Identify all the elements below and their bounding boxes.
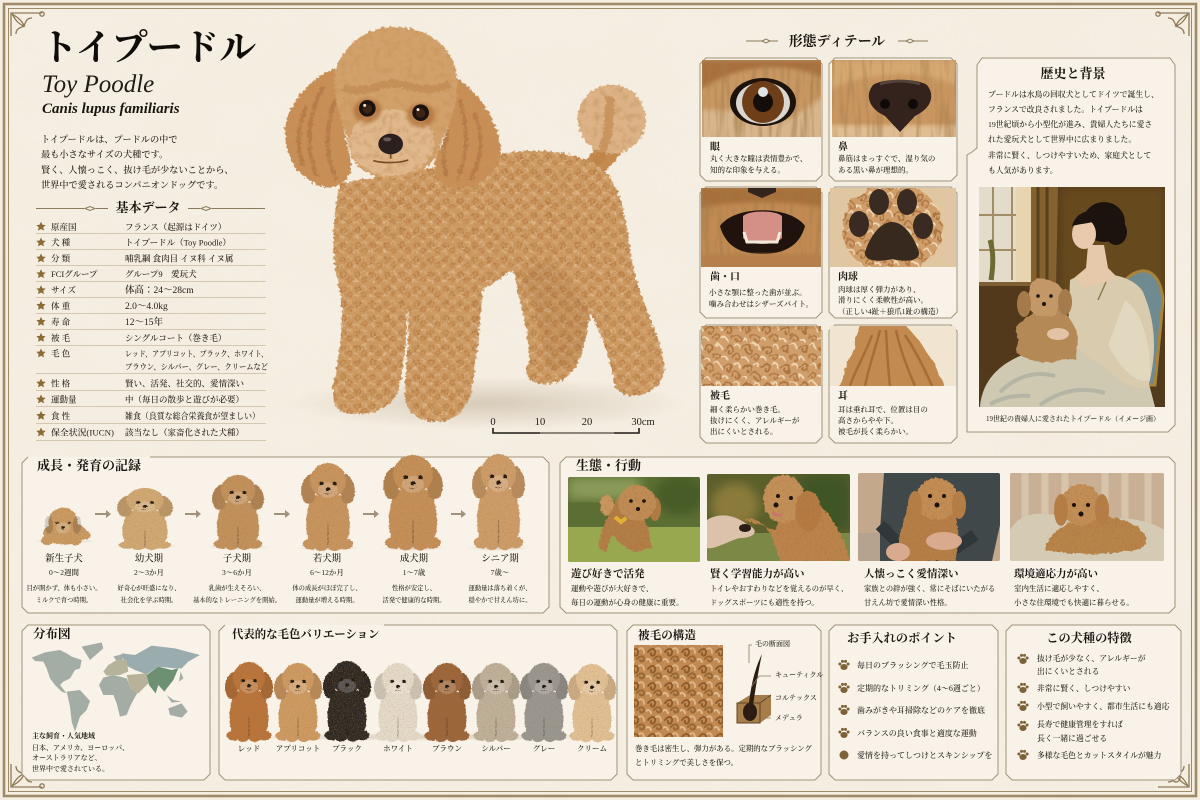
- row: temperament: 性 格: [51, 378, 71, 388]
- row: lifespan: 12〜15年: [125, 316, 164, 328]
- stage: puppy: 乳歯が生えそろい、: [209, 583, 265, 592]
- scale bar: 30cm: [631, 417, 655, 428]
- title block: [41, 27, 256, 117]
- intro text: トイプードルは、プードルの中で: [41, 134, 178, 144]
- stage: newborn: 0〜2週間: [49, 568, 79, 577]
- coat caption: [710, 389, 800, 436]
- mouth caption: 歯・口: [710, 270, 740, 283]
- heading: basic data: 基本データ: [115, 200, 181, 215]
- row: temperament: [51, 378, 244, 388]
- dress torso and sleeve: [1068, 274, 1154, 389]
- arrow: [274, 510, 290, 518]
- stage: senior: 運動量は落ち着くが、: [469, 583, 531, 592]
- dog: brown: ブラウン: [432, 744, 462, 753]
- feature 4: 長く一緒に過ごせる: [1037, 733, 1107, 743]
- scale bar: [490, 417, 655, 433]
- dog: apricot: アプリコット: [276, 744, 320, 753]
- row: exercise: 中（毎日の散歩と遊びが必要）: [125, 394, 244, 404]
- row: exercise: 運動量: [51, 394, 77, 404]
- title: トイプードル: [41, 27, 256, 68]
- row: size: サイズ: [51, 285, 76, 295]
- dog: silver: シルバー: [481, 744, 511, 753]
- row: weight: 2.0〜4.0kg: [125, 302, 168, 312]
- row: coat: [51, 333, 226, 343]
- intro text: 最も小さなサイズの犬種です。: [41, 148, 168, 160]
- paw caption: （正しい4趾＋狼爪1趾の構造）: [838, 306, 943, 316]
- curtain: [1031, 187, 1058, 290]
- history text: 非常に賢く、しつけやすいため、家庭犬として: [988, 150, 1151, 160]
- map text: オーストラリアなど、: [32, 754, 102, 762]
- left eye: [353, 99, 381, 123]
- panel: coat: [700, 324, 822, 444]
- stage: puppy: 子犬期: [223, 552, 252, 564]
- panel: coat structure: [627, 625, 823, 780]
- colours heading: 代表的な毛色バリエーション: [232, 627, 379, 641]
- features heading: この犬種の特徴: [1046, 630, 1132, 645]
- photo: affectionate: [858, 473, 1000, 561]
- stage: newborn: ミルクで育つ時期。: [36, 595, 92, 604]
- paw caption: 肉球は厚く弾力があり、: [838, 284, 920, 294]
- row: diet: [51, 411, 260, 421]
- row: coat: シングルコート（巻き毛）: [125, 333, 226, 343]
- stage: young: 6〜12か月: [310, 568, 344, 577]
- photo: adaptable: [1010, 473, 1164, 561]
- feature 4: [1017, 719, 1123, 743]
- photo: playful: [568, 475, 705, 562]
- stage: adult: 活発で健康的な時期。: [383, 595, 445, 604]
- hair cross section diagram: [737, 639, 823, 723]
- head: [334, 27, 457, 178]
- stage: newborn: 新生子犬: [45, 552, 83, 564]
- panel: basic data table: [36, 200, 268, 440]
- nose caption: 鼻筋はまっすぐで、湿り気の: [838, 153, 935, 163]
- photo: intelligent: [707, 474, 850, 561]
- dog: cream: クリーム: [577, 744, 607, 753]
- row: lifespan: [51, 316, 164, 328]
- right ear: [435, 75, 501, 188]
- caption: playful: 遊び好きで活発: [571, 567, 645, 580]
- arrow: [185, 510, 201, 518]
- history text: も人気があります。: [988, 165, 1058, 175]
- row: taxonomy: 哺乳綱 食肉目 イヌ科 イヌ属: [125, 254, 233, 264]
- coat texture swatch: [634, 645, 723, 737]
- dog: silver: [472, 663, 520, 753]
- row: origin: フランス（起源はドイツ）: [125, 222, 226, 232]
- dog: red: [225, 662, 273, 753]
- caption: playful: 毎日の運動が心身の健康に重要。: [571, 597, 684, 607]
- intro text: [41, 134, 234, 190]
- map text: 世界中で愛されている。: [32, 764, 109, 773]
- ear image: [829, 325, 957, 390]
- ear caption: [838, 389, 928, 436]
- main illustration: standing toy poodle: [285, 27, 687, 430]
- mouth caption: 噛み合わせはシザーズバイト。: [709, 298, 813, 308]
- tail: [578, 85, 646, 173]
- caption: adaptable: [1014, 567, 1134, 607]
- scale bar: 0: [490, 417, 496, 428]
- right eye: [407, 103, 435, 127]
- window: [979, 187, 1031, 282]
- feature 1: 出にくいとされる: [1037, 666, 1099, 676]
- feature 2: 非常に賢く、しつけやすい: [1037, 683, 1131, 693]
- history text: プードルは水鳥の回収犬としてドイツで誕生し、: [988, 89, 1159, 99]
- stage: infant: 幼犬期: [135, 552, 164, 564]
- intro text: 世界中で愛されるコンパニオンドッグです。: [41, 179, 223, 190]
- stage: senior: 穏やかで甘えん坊に。: [469, 595, 531, 604]
- row: taxonomy: [51, 254, 233, 264]
- paw caption: 肉球: [838, 270, 858, 283]
- scientific name: Canis lupus familiaris: [42, 101, 180, 117]
- panel: growth record: [22, 454, 549, 613]
- map text: [32, 731, 129, 773]
- mouth caption: [709, 270, 813, 308]
- row: FCI: FCIグループ: [51, 269, 98, 279]
- hair cross section diagram: メデュラ: [775, 714, 803, 722]
- row: weight: [51, 301, 168, 312]
- caption: adaptable: 環境適応力が高い: [1014, 567, 1098, 580]
- panel: ear: [829, 325, 957, 443]
- feature 1: [1017, 653, 1146, 676]
- nose image: [829, 60, 957, 140]
- coat caption: 被毛: [710, 389, 730, 402]
- paw caption: 滑りにくく柔軟性が高い。: [838, 294, 928, 304]
- dog: red: レッド: [238, 744, 260, 753]
- row: breed: トイプードル（Toy Poodle）: [125, 238, 231, 248]
- map text: 日本、アメリカ、ヨーロッパ、: [32, 743, 129, 752]
- coat structure text: とトリミングで美しさを保つ。: [635, 758, 738, 767]
- stage: puppy: 3〜6か月: [222, 568, 252, 577]
- ear caption: 耳は垂れ耳で、位置は目の: [838, 404, 928, 414]
- stage: senior: シニア期: [481, 552, 519, 564]
- poodle in painting: [1016, 279, 1078, 362]
- grooming item 3: 歯みがきや耳掃除などのケアを徹底: [857, 705, 985, 715]
- row: size: [51, 284, 194, 296]
- dog: grey: [520, 663, 568, 753]
- stage: senior: 7歳〜: [491, 567, 510, 577]
- caption: playful: 運動や遊びが大好きで、: [571, 583, 653, 593]
- coat structure text: 巻き毛は密生し、弾力がある。定期的なブラッシング: [635, 744, 813, 753]
- row: breed: 犬 種: [51, 238, 71, 248]
- row: taxonomy: 分 類: [51, 254, 71, 264]
- ear caption: 耳: [838, 389, 848, 402]
- stage: adult: [379, 455, 447, 604]
- caption: affectionate: [864, 567, 995, 607]
- history heading: 歴史と背景: [1040, 66, 1106, 81]
- behaviour heading: 生態・行動: [576, 458, 641, 473]
- dog: black: ブラック: [332, 744, 362, 753]
- stage: infant: 2〜3か月: [134, 568, 164, 577]
- heading: morphology details: 形態ディテール: [789, 33, 885, 50]
- arrow: [451, 510, 466, 518]
- nose caption: 鼻: [838, 140, 848, 153]
- stage: newborn: 目が開かず、体も小さい。: [26, 583, 102, 592]
- row: colours: [51, 348, 268, 372]
- grooming item 2: 定期的なトリミング（4〜6週ごと）: [857, 683, 985, 693]
- caption: intelligent: [710, 567, 848, 607]
- caption: intelligent: 賢く学習能力が高い: [710, 567, 804, 580]
- panel: coat colour variations: [219, 625, 617, 780]
- nose caption: ある黒い鼻が理想的。: [838, 164, 913, 174]
- left ear: [285, 68, 351, 188]
- row: temperament: 賢い、活発、社交的、愛情深い: [125, 378, 244, 388]
- world map: [32, 642, 200, 732]
- stage: young: 若犬期: [313, 552, 342, 564]
- table: [984, 286, 998, 288]
- feature 3: 小型で飼いやすく、都市生活にも適応: [1037, 701, 1171, 711]
- nose and mouth: [373, 134, 408, 163]
- caption: intelligent: ドッグスポーツにも適性を持つ。: [710, 598, 819, 607]
- stage: young: [292, 463, 362, 604]
- stage: puppy: [193, 475, 281, 604]
- stage: adult: 性格が安定し、: [392, 583, 436, 592]
- history text: れた愛玩犬として世界中に広まりました。: [988, 134, 1136, 144]
- map text: 主な飼育・人気地域: [32, 731, 95, 740]
- arrow: [363, 510, 379, 518]
- arrow: [95, 510, 111, 518]
- coat structure heading: 被毛の構造: [638, 628, 696, 642]
- coat image: [701, 326, 821, 386]
- panel: ecology and behaviour: [560, 457, 1175, 613]
- growth heading: 成長・発育の記録: [37, 458, 141, 473]
- muzzle: [349, 109, 434, 176]
- row: exercise: [51, 394, 244, 404]
- coat caption: 抜けにくく、アレルギーが: [710, 415, 800, 425]
- map heading: 分布図: [33, 626, 71, 641]
- feature 1: 抜け毛が少なく、アレルギーが: [1037, 653, 1146, 663]
- caption: adaptable: 室内生活に適応しやすく、: [1014, 583, 1104, 593]
- ear caption: 高さからやや下。: [838, 415, 898, 425]
- grooming item 5: 愛情を持ってしつけとスキンシップを: [857, 750, 993, 760]
- row: diet: 食 性: [51, 411, 71, 421]
- coat caption: 細く柔らかい巻き毛。: [710, 404, 785, 414]
- panel: breed features: [1006, 625, 1181, 780]
- panel: eye: [700, 58, 824, 181]
- row: colours: 毛 色: [51, 348, 71, 358]
- row: coat: 被 毛: [51, 333, 71, 343]
- dog: white: ホワイト: [383, 744, 413, 753]
- caption: intelligent: トイレやおすわりなどを覚えるのが早く、: [710, 584, 848, 593]
- stage: infant: [112, 488, 180, 604]
- paw image: [830, 188, 956, 267]
- row: FCI: グループ9 愛玩犬: [125, 269, 197, 279]
- hair cross section diagram: キューティクル: [775, 670, 823, 679]
- newborn dog: [33, 508, 97, 545]
- history text: フランスで改良されました。トイプードルは: [988, 104, 1143, 114]
- row: conservation: [51, 428, 244, 438]
- row: conservation: 該当なし（家畜化された犬種）: [125, 428, 244, 438]
- row: colours: ブラウン、シルバー、グレー、クリームなど: [125, 362, 268, 372]
- scale bar: 20: [582, 417, 592, 428]
- coat structure text: [635, 744, 813, 767]
- grooming item 4: バランスの良い食事と適度な運動: [857, 728, 977, 738]
- scale bar: 10: [535, 417, 545, 428]
- grooming heading: お手入れのポイント: [847, 631, 957, 645]
- woman head: [1072, 202, 1127, 288]
- mouth caption: 小さな顎に整った歯が並ぶ。: [709, 287, 807, 297]
- row: FCI: [51, 269, 197, 279]
- row: conservation: 保全状況(IUCN): [51, 428, 114, 438]
- row: origin: [51, 222, 226, 232]
- dog: apricot: [274, 663, 322, 753]
- english name: Toy Poodle: [42, 71, 154, 98]
- stage: newborn: [26, 508, 102, 604]
- caption: adaptable: 小さな住環境でも快適に暮らせる。: [1014, 597, 1134, 607]
- row: size: 体高：24〜28cm: [125, 284, 194, 296]
- mouth image: [700, 187, 824, 269]
- panel: distribution map: [22, 625, 210, 780]
- stage: young: 運動量が増える時期。: [296, 595, 358, 604]
- painting: noblewoman with poodle: [979, 187, 1165, 407]
- heading: basic data: [36, 200, 265, 215]
- row: weight: 体 重: [51, 301, 71, 311]
- nose caption: [838, 140, 935, 174]
- eye image: [700, 60, 824, 140]
- painting caption: 19世紀の貴婦人に愛されたトイプードル（イメージ画）: [986, 414, 1160, 423]
- caption: affectionate: 人懐っこく愛情深い: [864, 567, 958, 580]
- stage: young: 体の成長がほぼ完了し、: [292, 583, 362, 592]
- skirt: [980, 344, 1155, 407]
- ear caption: 被毛が長く柔らかい。: [838, 426, 913, 436]
- panel: teeth and mouth: [700, 187, 824, 318]
- stage: adult: 成犬期: [400, 552, 429, 564]
- hands: [1047, 328, 1069, 340]
- history text: 19世紀頃から小型化が進み、貴婦人たちに愛さ: [988, 119, 1152, 129]
- dog: brown: [423, 663, 471, 753]
- panel: grooming points: [829, 625, 998, 780]
- hair cross section diagram: 毛の断面図: [755, 639, 790, 648]
- dog: grey: グレー: [533, 744, 555, 753]
- paw caption: [838, 270, 943, 316]
- stage: infant: 好奇心が旺盛になり、: [118, 583, 180, 592]
- stage: senior: [466, 454, 531, 604]
- coat caption: 出にくいとされる。: [710, 426, 778, 436]
- caption: playful: [571, 567, 684, 607]
- eye caption: 眼: [710, 141, 720, 153]
- eye caption: 知的な印象を与える。: [710, 164, 785, 174]
- chair: [1125, 271, 1163, 385]
- row: breed: [51, 238, 231, 248]
- grooming item 1: 毎日のブラッシングで毛玉防止: [857, 660, 968, 670]
- dog: white: [374, 663, 422, 753]
- feature 5: 多様な毛色とカットスタイルが魅力: [1037, 750, 1162, 760]
- panel: nose: [829, 58, 957, 181]
- stage: infant: 社会化を学ぶ時期。: [121, 595, 177, 604]
- row: origin: 原産国: [51, 222, 77, 232]
- hair cross section diagram: コルテックス: [775, 693, 817, 702]
- caption: affectionate: 甘えん坊で愛情深い性格。: [864, 598, 952, 607]
- row: colours: レッド、アプリコット、ブラック、ホワイト、: [125, 350, 268, 358]
- eye caption: 丸く大きな瞳は表情豊かで、: [710, 153, 807, 163]
- stage: adult: 1〜7歳: [403, 567, 426, 577]
- panel: history and background: [967, 58, 1175, 432]
- body silhouette: [332, 151, 664, 421]
- caption: affectionate: 家族との絆が強く、常にそばにいたがる: [864, 584, 995, 593]
- intro text: 賢く、人懐っこく、抜け毛が少ないことから、: [41, 164, 234, 175]
- panel: paw pads: [829, 182, 957, 318]
- stage: puppy: 基本的なトレーニングを開始。: [193, 595, 281, 604]
- dog: cream: [568, 664, 616, 753]
- row: lifespan: 寿 命: [51, 317, 71, 327]
- heading: morphology details: [746, 33, 928, 50]
- eye caption: [710, 141, 807, 174]
- dog: black: [323, 661, 371, 753]
- feature 4: 長寿で健康管理をすれば: [1037, 719, 1123, 729]
- row: diet: 雑食（良質な総合栄養食が望ましい）: [125, 411, 260, 421]
- history text: [988, 89, 1159, 175]
